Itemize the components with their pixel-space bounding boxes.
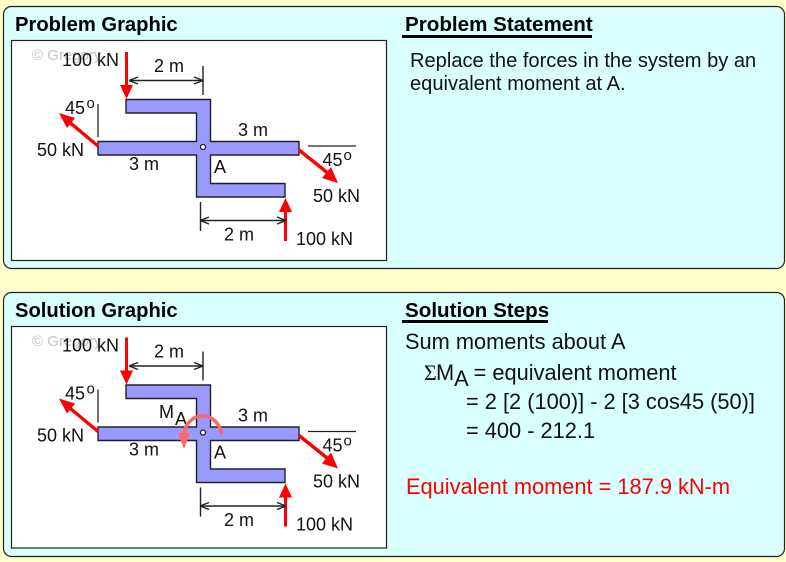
dimension: top 2 m — [129, 342, 203, 380]
dimension: bottom 2 m — [200, 202, 286, 244]
force: 100 kN down: 100 kN — [62, 50, 119, 70]
structural member — [98, 385, 299, 482]
watermark: © Gregory — [32, 47, 102, 64]
dimension: top 2 m — [129, 56, 203, 95]
dimension: top 2 m: 2 m — [154, 342, 184, 362]
moment arrow MA: A — [175, 409, 187, 429]
problem graphic diagram — [12, 40, 386, 260]
angle: 45 lower right — [308, 146, 356, 170]
force: 50 kN upper left: 50 kN — [37, 140, 84, 160]
angle: 45 upper left — [65, 380, 98, 422]
angle: 45 lower right — [308, 432, 356, 456]
angle: 45 lower right: o — [344, 147, 352, 164]
force: 50 kN upper left — [37, 113, 98, 160]
label: 3 m right: 3 m — [238, 406, 268, 426]
angle: 45 lower right: 45 — [322, 150, 343, 170]
angle: 45 upper left: 45 — [65, 98, 85, 118]
force: 50 kN lower right — [299, 150, 360, 206]
label: A: A — [214, 442, 226, 462]
force: 100 kN up: 100 kN — [296, 229, 353, 249]
label: A: A — [214, 157, 226, 177]
moment arrow MA — [159, 402, 222, 449]
force: 50 kN upper left: 50 kN — [37, 426, 84, 446]
solution step lines: = 2 [2 (100)] - 2 [3 cos45 (50)] — [466, 389, 755, 414]
force: 100 kN up — [279, 198, 353, 249]
angle: 45 upper left: o — [86, 380, 95, 398]
problem statement text: equivalent moment at A. — [410, 73, 626, 95]
heading: problem statement: Problem Statement — [405, 13, 593, 36]
panel: problem — [4, 6, 784, 268]
pivot A — [200, 144, 206, 150]
label: 3 m left: 3 m — [129, 154, 159, 174]
label: 3 m left: 3 m — [129, 440, 159, 460]
problem statement text: Replace the forces in the system by an — [410, 50, 756, 72]
heading: problem graphic: Problem Graphic — [15, 14, 178, 36]
heading: solution graphic: Solution Graphic — [15, 300, 178, 322]
dimension: bottom 2 m: 2 m — [224, 224, 254, 244]
watermark: © Gregory — [32, 333, 102, 350]
force: 100 kN down: 100 kN — [62, 336, 119, 356]
dimension: top 2 m: 2 m — [154, 56, 184, 76]
pivot A — [200, 430, 206, 435]
heading: solution steps: Solution Steps — [405, 299, 549, 322]
solution step lines — [405, 329, 755, 443]
panel: solution — [4, 292, 784, 556]
force: 50 kN lower right — [299, 436, 360, 492]
force: 100 kN down — [62, 50, 133, 99]
angle: 45 lower right: o — [344, 432, 352, 450]
force: 50 kN upper left — [37, 398, 98, 446]
dimension: bottom 2 m — [200, 488, 286, 530]
solution graphic diagram — [12, 326, 386, 548]
solution step lines: Σ — [424, 360, 437, 385]
force: 100 kN up: 100 kN — [296, 514, 353, 534]
force: 100 kN down — [62, 336, 133, 384]
result: Equivalent moment = 187.9 kN-m — [406, 474, 730, 499]
dimension: bottom 2 m: 2 m — [224, 510, 254, 530]
moment arrow MA: M — [159, 402, 174, 422]
force: 100 kN up — [279, 484, 353, 534]
angle: 45 lower right: 45 — [322, 436, 343, 456]
angle: 45 upper left: 45 — [65, 384, 85, 404]
force: 50 kN lower right: 50 kN — [313, 186, 360, 206]
solution step lines: M — [436, 360, 454, 385]
solution step lines: A — [454, 366, 469, 391]
angle: 45 upper left — [65, 95, 98, 137]
structural member — [98, 100, 299, 197]
force: 50 kN lower right: 50 kN — [313, 472, 360, 492]
solution step lines: = equivalent moment — [468, 360, 677, 385]
solution step lines: Sum moments about A — [405, 329, 626, 354]
label: 3 m right: 3 m — [238, 120, 268, 140]
angle: 45 upper left: o — [86, 95, 95, 112]
solution step lines: = 400 - 212.1 — [466, 418, 595, 443]
